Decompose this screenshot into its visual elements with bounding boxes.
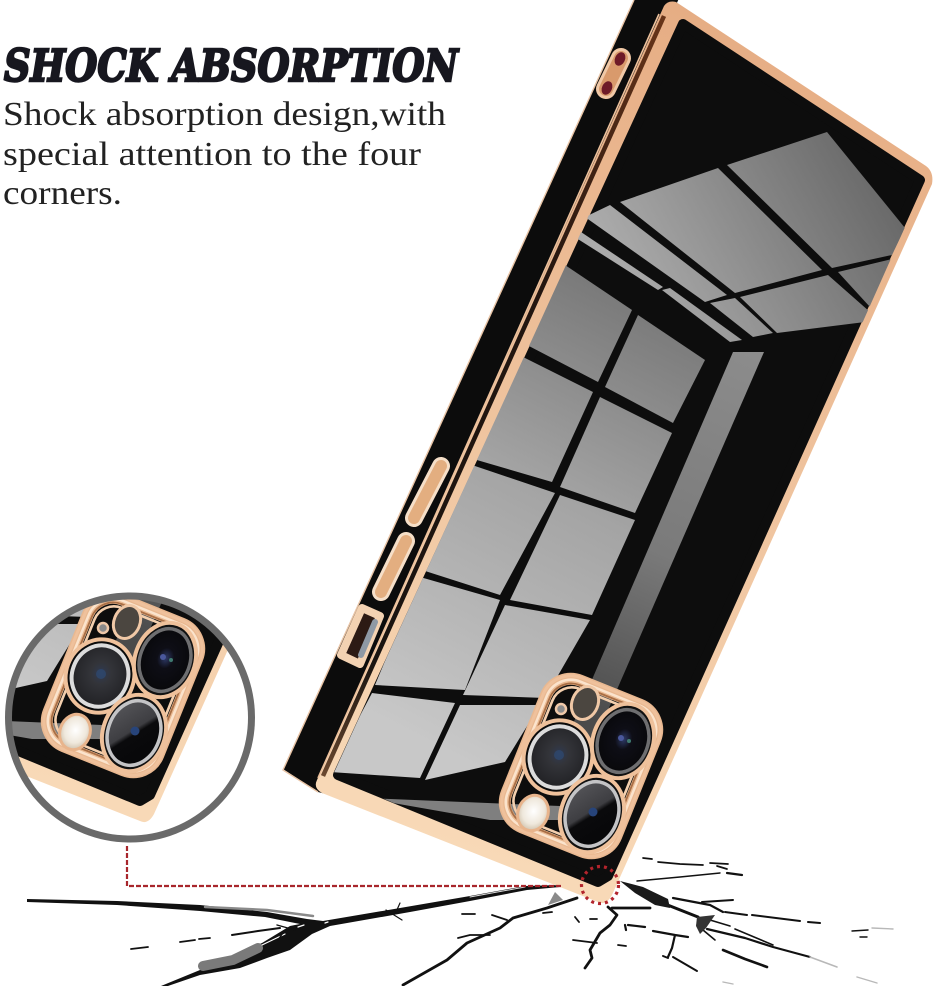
- volume button: [414, 466, 441, 518]
- ultra-wide lens: [513, 711, 603, 803]
- gold side edge: [283, 0, 634, 792]
- red dotted impact circle: [582, 866, 618, 904]
- gold rim: [316, 2, 932, 903]
- crack branches: [131, 858, 868, 985]
- heading: SHOCK ABSORPTION: [4, 41, 459, 92]
- phone glass: [338, 24, 920, 882]
- lidar sensor: [567, 682, 603, 724]
- window reflections: [330, 132, 905, 820]
- floor reflection band: [365, 798, 560, 820]
- body text: Shock absorption design,with: [3, 96, 446, 133]
- charging port: [341, 608, 380, 664]
- right wall strip: [566, 352, 764, 740]
- body text: [3, 96, 446, 212]
- magnified camera corner: [12, 600, 228, 822]
- left crack gray highlights: [203, 887, 525, 966]
- wall window panes: [330, 265, 705, 780]
- flash: [513, 791, 553, 835]
- right crack body: [620, 881, 670, 908]
- mic port: [600, 51, 627, 96]
- magnified detail circle: [5, 592, 255, 842]
- rim dark line: [323, 16, 664, 776]
- phone side strip: [283, 0, 680, 794]
- left crack: [27, 885, 560, 986]
- red dashed leader line: [127, 846, 562, 886]
- gray shard: [548, 892, 563, 905]
- ceiling panes: [570, 132, 905, 342]
- circle ring: [8, 596, 252, 839]
- phone case: [283, 0, 932, 903]
- body text: corners.: [3, 175, 122, 212]
- volume button: [381, 541, 406, 592]
- microphone: [556, 704, 566, 714]
- outer rim thin line: [318, 14, 659, 778]
- tele lens: [582, 695, 664, 787]
- fading crack: [723, 928, 893, 984]
- crack junction: [696, 915, 715, 934]
- camera bezel rings: [493, 667, 669, 865]
- cracked surface: [27, 858, 893, 986]
- body text: special attention to the four: [3, 136, 422, 173]
- main lens: [550, 767, 634, 861]
- camera module: [493, 667, 669, 865]
